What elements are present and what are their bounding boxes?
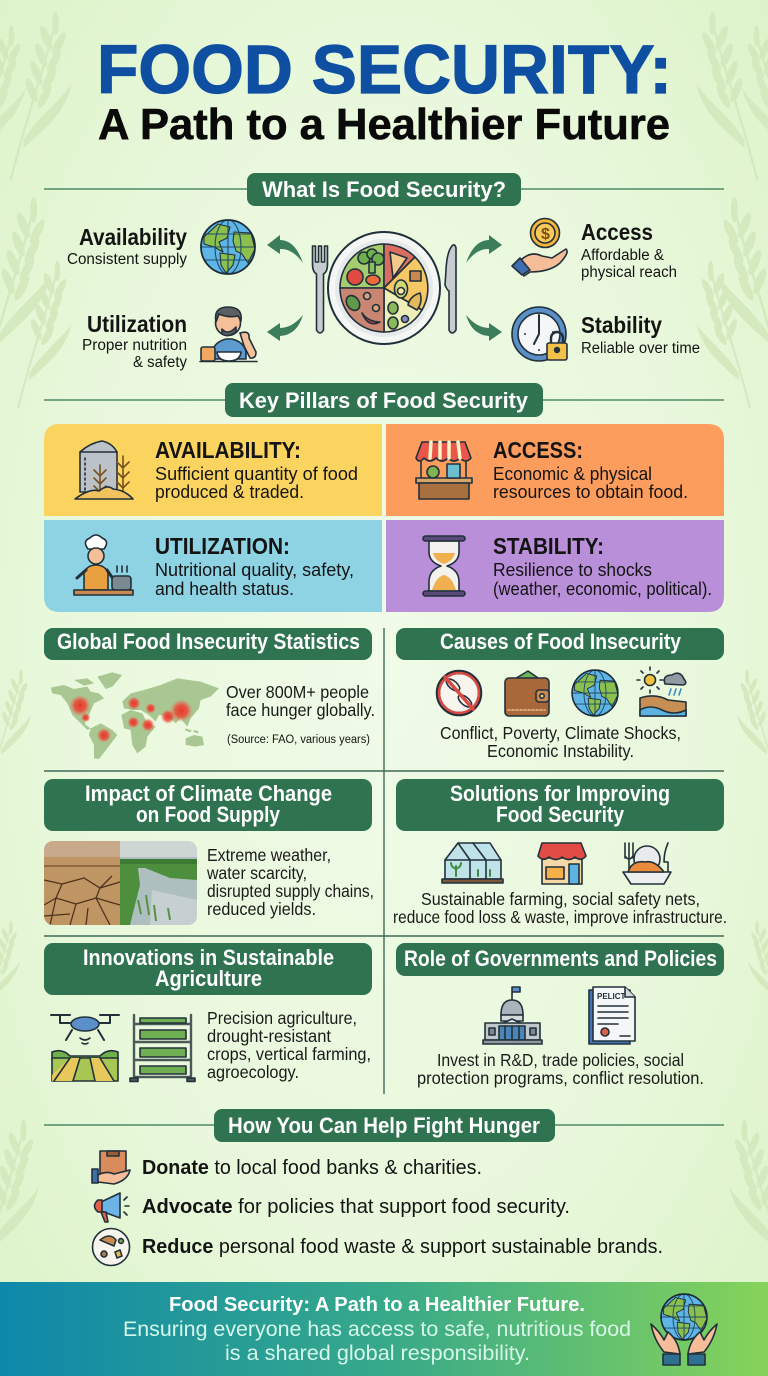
icon: earth (572, 670, 618, 716)
panel: causes (396, 628, 724, 761)
panel: impact of climate change: Extreme weather, (207, 845, 331, 865)
icon: vertical farm shelves (130, 1015, 195, 1082)
panel: availability pillar: produced & traded. (155, 481, 304, 502)
action: reduce (92, 1228, 663, 1266)
icon: fork (312, 246, 328, 333)
panel: impact of climate change: water scarcity, (206, 863, 307, 883)
title: A Path to a Healthier Future (98, 100, 670, 149)
panel: stability pillar: (weather, economic, political). (493, 578, 712, 599)
action: advocate: Advocate for policies that support food security. (142, 1195, 570, 1218)
panel: global statistics: Global Food Insecurity Statistics (57, 629, 360, 654)
panel: stability pillar (386, 520, 724, 612)
icon: market stall (416, 442, 472, 499)
panel: innovations: Innovations in Sustainable (83, 945, 334, 970)
panel: global statistics (44, 628, 375, 759)
icon: knife (445, 245, 456, 333)
concept: access: physical reach (581, 264, 677, 281)
footer banner: is a shared global responsibility. (225, 1342, 530, 1365)
photo: drought and flood (44, 841, 197, 925)
panel: governments and policies: Invest in R&D, trade policies, social (437, 1050, 684, 1070)
icon: conflict (438, 672, 480, 714)
icon: hourglass (423, 536, 465, 596)
panel: governments and policies (396, 943, 724, 1088)
icon: megaphone (94, 1193, 129, 1222)
arrow: to utilization (267, 315, 303, 341)
panel: governments and policies: Role of Governments and Policies (404, 946, 717, 971)
icon: plate of scraps (92, 1228, 130, 1266)
panel: innovations: drought-resistant (207, 1026, 331, 1046)
icon: hand with coin (512, 218, 567, 276)
section divider: How You Can Help: How You Can Help Fight Hunger (228, 1113, 540, 1138)
panel: impact of climate change (44, 779, 374, 925)
icon: greenhouse (442, 843, 503, 883)
concept: utilization: & safety (133, 354, 187, 371)
panel: availability pillar: AVAILABILITY: (155, 437, 301, 463)
panel: utilization pillar: and health status. (155, 578, 294, 599)
panel: solutions: Food Security (496, 802, 625, 827)
panel: stability pillar: Resilience to shocks (493, 559, 652, 580)
icon: policy document (589, 987, 635, 1044)
panel: solutions: Solutions for Improving (450, 781, 670, 806)
action: reduce: Reduce personal food waste & support sustainable brands. (142, 1235, 663, 1258)
panel: causes: Economic Instability. (487, 741, 634, 761)
panel: access pillar (386, 424, 724, 516)
concept: stability: Reliable over time (581, 340, 700, 357)
panel: global statistics: face hunger globally. (226, 700, 375, 720)
section divider: Key Pillars: Key Pillars of Food Security (239, 388, 529, 413)
concept: availability: Consistent supply (67, 251, 187, 268)
panel: innovations: crops, vertical farming, (207, 1044, 371, 1064)
icon: clock with lock (512, 307, 567, 361)
panel: impact of climate change: disrupted supply chains, (207, 881, 374, 901)
concept: availability: Availability (79, 224, 187, 250)
section divider: Key Pillars (44, 383, 724, 417)
icon: hands holding globe (651, 1294, 717, 1365)
panel: governments and policies: protection programs, conflict resolution. (417, 1068, 704, 1088)
panel: access pillar: Economic & physical (493, 463, 652, 484)
action: donate (92, 1151, 482, 1184)
panel: availability pillar (44, 424, 382, 516)
section divider: What Is Food Security: What Is Food Security? (262, 177, 506, 202)
icon: drone over field (51, 1015, 119, 1081)
icon: person eating (200, 307, 257, 362)
concept: access: Affordable & (581, 247, 665, 264)
panel: impact of climate change: reduced yields. (207, 899, 316, 919)
icon: hand with coin: $ (541, 226, 550, 243)
panel: solutions: Sustainable farming, social safety nets, (421, 889, 700, 909)
icon: hand holding box (92, 1151, 130, 1184)
panel: utilization pillar: UTILIZATION: (155, 533, 290, 559)
panel: impact of climate change: Impact of Climate Change (85, 781, 332, 806)
icon: wallet (505, 671, 549, 716)
panel: innovations: Precision agriculture, (207, 1008, 357, 1028)
icon: plate with food wedges (328, 232, 440, 344)
panel: utilization pillar: Nutritional quality, safety, (155, 559, 354, 580)
panel: innovations: agroecology. (207, 1062, 299, 1082)
footer banner (0, 1282, 768, 1376)
arrow: to access (466, 235, 502, 263)
icon: capitol building (483, 987, 542, 1044)
arrow: to availability (267, 235, 303, 263)
panel: solutions (393, 779, 727, 927)
panel: access pillar: resources to obtain food. (493, 481, 688, 502)
panel: innovations: Agriculture (155, 966, 262, 991)
panel: stability pillar: STABILITY: (493, 533, 604, 559)
panel: global statistics: Over 800M+ people (226, 682, 369, 702)
grid dividers (44, 628, 724, 1094)
panel: solutions: reduce food loss & waste, improve infrastructure. (393, 907, 727, 927)
icon: chef cooking (74, 535, 133, 595)
panel: global statistics: (Source: FAO, various years) (227, 734, 370, 746)
panel: availability pillar: Sufficient quantity of food (155, 463, 358, 484)
title (97, 31, 672, 149)
panel: innovations (44, 943, 372, 1082)
concept: availability (67, 220, 255, 274)
concept: stability (512, 307, 700, 361)
section divider: What Is Food Security (44, 173, 724, 206)
icon: grain silo (75, 441, 133, 499)
concept: utilization: Utilization (87, 311, 187, 337)
footer banner: Food Security: A Path to a Healthier Future. (169, 1294, 585, 1316)
panel: utilization pillar (44, 520, 382, 612)
panel: causes: Conflict, Poverty, Climate Shocks, (440, 723, 681, 743)
icon: climate shocks (637, 667, 686, 716)
section divider: How You Can Help (44, 1109, 724, 1142)
chart: world hunger map (51, 672, 219, 759)
concept: utilization (82, 307, 257, 371)
title: FOOD SECURITY: (97, 31, 672, 108)
panel: impact of climate change: on Food Supply (136, 802, 281, 827)
concept: stability: Stability (581, 312, 662, 338)
icon: storefront (538, 843, 586, 884)
arrow: to stability (466, 315, 502, 341)
icon: policy document: PELICT (597, 992, 626, 1001)
action: donate: Donate to local food banks & charities. (142, 1156, 482, 1179)
panel: access pillar: ACCESS: (493, 437, 583, 463)
panel: causes: Causes of Food Insecurity (440, 629, 682, 654)
concept: access (512, 218, 677, 281)
concept: access: Access (581, 219, 653, 245)
icon: plate and cutlery (623, 843, 671, 884)
footer banner: Ensuring everyone has access to safe, nutritious food (123, 1318, 631, 1341)
concept: utilization: Proper nutrition (82, 337, 187, 354)
